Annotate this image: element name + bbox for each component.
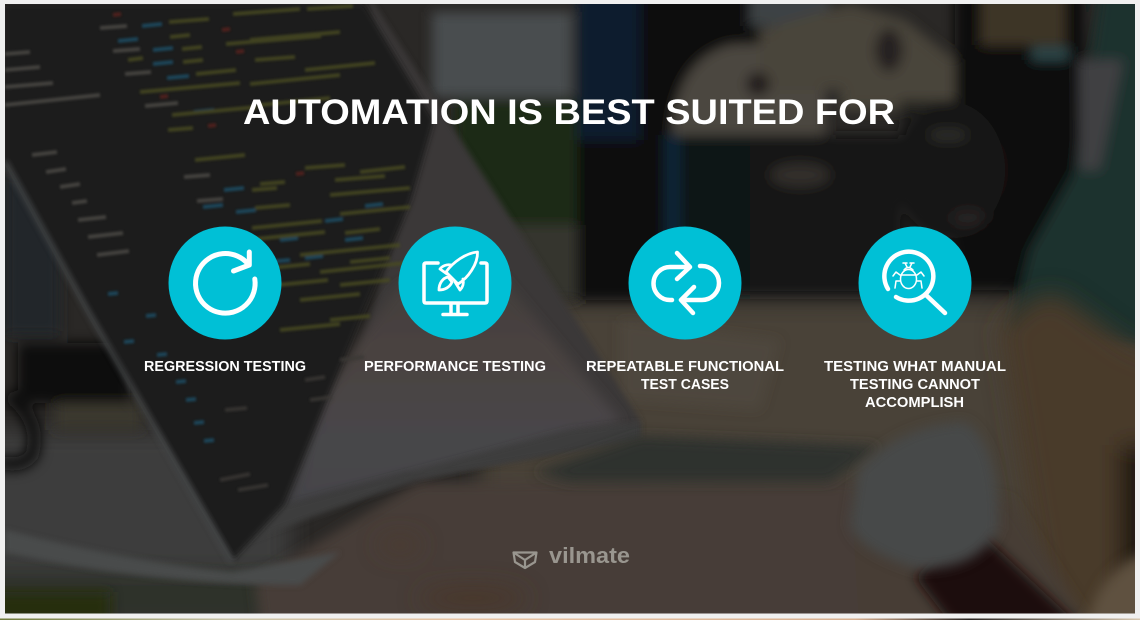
label: testing what manual testing cannot accomplish: ACCOMPLISH [865, 395, 964, 411]
icon: bug under magnifying glass [858, 226, 972, 340]
keyboard [535, 436, 880, 482]
desk surface [0, 302, 1140, 620]
forearm [1000, 294, 1140, 620]
icon: vilmate envelope mark [514, 552, 536, 568]
label: repeatable functional test cases: TEST CASES [641, 377, 729, 393]
column: repeatable functional test cases [586, 226, 784, 393]
logo: vilmate [514, 543, 630, 568]
icon: repeat arrows [628, 226, 742, 340]
screen reflection [288, 296, 615, 503]
hand [255, 480, 1100, 620]
label: testing what manual testing cannot accomplish: TESTING WHAT MANUAL [824, 359, 1006, 375]
label: repeatable functional test cases: REPEATABLE FUNCTIONAL [586, 359, 784, 375]
column: regression testing [144, 226, 306, 375]
column: testing what manual testing cannot accomplish [824, 226, 1006, 411]
wristwatch [850, 422, 1140, 620]
icon: circular refresh arrow [168, 226, 282, 340]
title: AUTOMATION IS BEST SUITED FOR [243, 93, 895, 132]
blurred code lines [5, 6, 410, 490]
bottom edge strip [0, 618, 1140, 620]
label: testing what manual testing cannot accomplish: TESTING CANNOT [850, 377, 980, 393]
icon: rocket on monitor [398, 226, 512, 340]
code editor screen [5, 4, 434, 560]
laptop base [5, 436, 608, 586]
label: performance testing: PERFORMANCE TESTING [364, 359, 546, 375]
laptop bezel [5, 162, 232, 562]
hand tones [448, 592, 498, 604]
column: performance testing [364, 226, 546, 375]
label: regression testing: REGRESSION TESTING [144, 359, 306, 375]
wordmark: vilmate [549, 543, 630, 568]
laptop lid [370, 4, 639, 423]
